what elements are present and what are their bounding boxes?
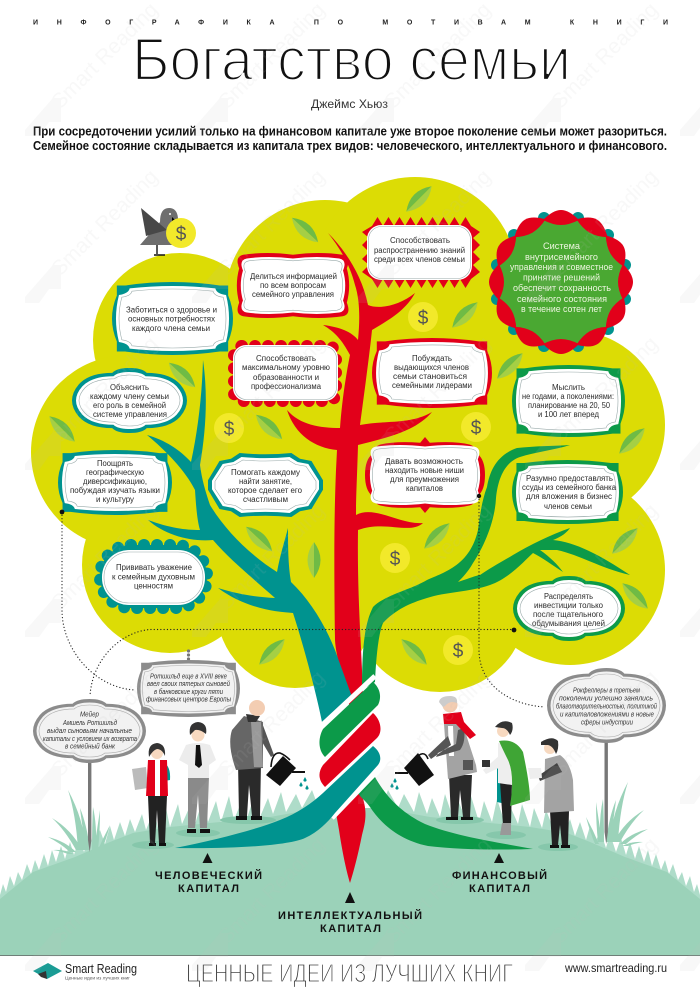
box: encourage leaders: выдающихся членов [394,363,469,372]
box: new niches: Давать возможность [385,457,463,466]
box: think in generations: не годами, а поколениями: [522,392,614,401]
watermark pattern: Smart Reading [380,499,496,615]
footer [0,955,700,988]
green seal: family governance: обеспечит сохранность [513,283,611,294]
coins: $ [453,641,464,662]
person: older man with watering can [220,700,309,824]
ground hill with grass [0,782,700,955]
sign: Mayer Amschel Rothschild: Мейер [80,710,99,718]
label: human capital [155,853,262,895]
coins: $ [390,549,401,570]
leaves [45,182,652,669]
label: financial capital: КАПИТАЛ [469,883,530,895]
box: new niches [365,437,485,513]
footer logo: Smart Reading [65,962,137,976]
bird with coin [140,208,196,255]
sign: Rockefellers: благотворительностью, политикой [556,702,657,710]
trunk knot: intertwined bands [175,676,383,848]
box: explain roles [72,368,187,433]
box: encourage leaders: Побуждать [412,354,452,363]
sign: Mayer Amschel Rothschild: выдал сыновьям начальные [47,727,132,735]
box: spread knowledge: среди всех членов семьи [374,255,465,264]
sign: Rothschild five sons: Ротшильд еще в XVIII веке [150,672,227,680]
box: encourage leaders [372,338,492,408]
red trunk: intellectual capital [287,233,432,710]
box: geographic diversification: Поощрять [97,459,133,468]
box: share information: Делиться информацией [250,272,337,281]
watermark pattern: Smart Reading [547,833,663,949]
box: new niches: капиталов [406,484,443,493]
sign: Rockefellers: сферы индустрии [581,718,633,726]
green root [358,777,533,850]
box: spiritual values: Прививать уважение [116,563,193,572]
box: distribute investments [513,576,625,641]
sign: Rothschild five sons: ввел своих пятерых сыновей [147,680,230,688]
box: family bank loans: ссуды из семейного банка [522,483,617,492]
box: help find occupation [208,453,323,517]
box: geographic diversification: географическую [86,468,144,477]
box: family bank loans: для вложения в бизнес [526,492,612,501]
person: woman with clipboard [132,743,174,849]
watermark pattern: Smart Reading [214,0,330,114]
sign: Rothschild five sons: финансовых центров Европы [146,696,232,704]
box: think in generations: и 100 лет вперед [538,410,599,419]
footer: ЦЕННЫЕ ИДЕИ ИЗ ЛУЧШИХ КНИГ [186,958,513,988]
box: geographic diversification [58,450,172,515]
box: education: Способствовать [256,354,316,363]
watermark pattern: Smart Reading [380,666,496,782]
green branches: financial capital [362,445,630,690]
label: human capital: ЧЕЛОВЕЧЕСКИЙ [155,869,262,882]
watermark pattern: Smart Reading [380,332,496,448]
box: family bank loans: членов семьи [544,502,592,511]
box: health care: каждого члена семьи [132,324,210,333]
watermark pattern: Smart Reading [47,833,163,949]
coins: $ [418,308,429,329]
box: geographic diversification: побуждая изучать языки [70,486,160,495]
green seal: family governance: семейного состояния [517,294,607,305]
watermark pattern: Smart Reading [380,833,496,949]
box: help find occupation: счастливым [243,495,288,504]
top caption: ИНФОГРАФИКА ПО МОТИВАМ КНИГИ [33,20,668,26]
box: help find occupation: которое сделает его [228,486,303,495]
watermark pattern: Smart Reading [380,0,496,114]
green seal: family governance: Система [543,241,581,252]
watermark pattern: Smart Reading [214,332,330,448]
watermark pattern: Smart Reading [547,0,663,114]
watermark pattern: Smart Reading [47,666,163,782]
box: education: образованности и [253,373,319,382]
person: figure in green cape with cup [482,721,530,839]
sign connector [187,649,190,661]
watermark pattern: Smart Reading [380,165,496,281]
sign: Rothschild five sons: в банковские круги пяти [154,688,223,696]
box: family bank loans: Разумно предоставлять [526,474,613,483]
box: share information: семейного управления [252,290,334,299]
intro text [33,124,667,153]
sign: Rockefellers: поколении успешно занялись [559,696,653,702]
watermark pattern: Smart Reading [547,666,663,782]
box: geographic diversification: диверсификацию, [83,477,147,486]
connector dots [60,494,516,632]
box: think in generations: планирование на 20, 50 [528,401,611,410]
watermark pattern: Smart Reading [547,332,663,448]
box: encourage leaders: семьи становиться [393,372,467,381]
watermark pattern: Smart Reading [214,165,330,281]
bird with coin: $ [176,224,187,245]
footer logo: Ценные идеи из лучших книг [65,976,130,980]
watermark pattern: Smart Reading [214,666,330,782]
box: spread knowledge: распространению знаний [374,246,465,255]
footer logo [33,962,137,980]
person: man with tie [176,722,220,837]
label: intellectual capital: КАПИТАЛ [320,923,381,935]
watermark pattern: Smart Reading [47,332,163,448]
box: spiritual values: к семейным духовным [112,572,195,582]
sign: Rothschild five sons [137,660,240,717]
coins: $ [471,418,482,439]
watermark pattern: Smart Reading [214,499,330,615]
sign: Mayer Amschel Rothschild [33,699,146,852]
box: share information [237,253,349,318]
box: spiritual values: ценностям [134,582,173,590]
watermark pattern: Smart Reading [214,833,330,949]
box: spiritual values [100,545,207,608]
box: distribute investments: Распределять [544,592,593,601]
green seal: family governance: управления и совместное [510,262,613,273]
teal branches: human capital [147,360,352,727]
label: financial capital [452,853,547,895]
red root tip [336,790,366,883]
footer: www.smartreading.ru [564,961,667,975]
box: help find occupation: найти занятие, [239,477,292,486]
label: financial capital: ФИНАНСОВЫЙ [452,869,547,882]
box: distribute investments: инвестиции только [534,601,604,610]
sign: Mayer Amschel Rothschild: в семейный банк [65,742,116,750]
watermark pattern: Smart Reading [47,0,163,114]
box: new niches: находить новые ниши [385,466,464,475]
label: human capital: КАПИТАЛ [178,883,239,895]
sign: Mayer Amschel Rothschild: Амшель Ротшильд [62,719,117,727]
box: education: профессионализма [251,382,322,391]
box: geographic diversification: и культуру [96,495,134,504]
box: encourage leaders: семейными лидерами [392,381,472,390]
sign: Mayer Amschel Rothschild: капиталы с условием их возврата [43,736,137,743]
box: education [233,345,338,401]
box: explain roles: системе управления [93,410,167,419]
coins [214,302,491,665]
green seal: family governance: принятие решений [523,272,600,284]
box: explain roles: каждому члену семьи [90,392,169,401]
sign: Rockefellers: и капиталовложениями в новые [560,712,654,718]
box: education: максимальному уровню [242,363,330,372]
sign: Rockefellers: Рокфеллеры в третьем [573,688,640,694]
green seal: family governance: в течение сотен лет [521,304,603,315]
box: think in generations: Мыслить [552,383,585,392]
box: new niches: для преумножения [390,475,459,484]
box: share information: по всем вопросам [260,281,326,290]
watermark pattern: Smart Reading [47,499,163,615]
box: explain roles: его роль в семейной [93,401,166,410]
dotted connector lines [62,496,545,707]
person: man in grey coat with papers [528,738,578,851]
author: Джеймс Хьюз [311,97,389,111]
box: health care: Заботиться о здоровье и [126,306,217,314]
box: help find occupation: Помогать каждому [231,468,300,477]
person: man in red scarf with watering can [390,696,484,824]
watermark pattern: Smart Reading [47,165,163,281]
label: intellectual capital [278,892,422,935]
box: family bank loans [512,460,623,524]
title: Богатство семьи [132,26,571,93]
box: explain roles: Объяснить [110,383,149,392]
canopy of the tree [31,177,665,692]
watermark pattern: Smart Reading [547,499,663,615]
box: health care: основных потребностях [128,315,215,324]
box: spread knowledge [362,217,480,288]
box: think in generations [512,365,625,437]
box: health care [112,282,233,355]
box: distribute investments: после тщательного [533,610,604,619]
box: distribute investments: обдумывания целей [532,619,605,628]
watermark pattern: Smart Reading [547,165,663,281]
label: intellectual capital: ИНТЕЛЛЕКТУАЛЬНЫЙ [278,909,422,922]
coins: $ [224,419,235,440]
sign: Rockefellers [547,668,666,844]
green seal: family governance: внутрисемейного [525,252,598,263]
box: spread knowledge: Способствовать [390,236,450,245]
green seal: family governance [489,210,633,354]
